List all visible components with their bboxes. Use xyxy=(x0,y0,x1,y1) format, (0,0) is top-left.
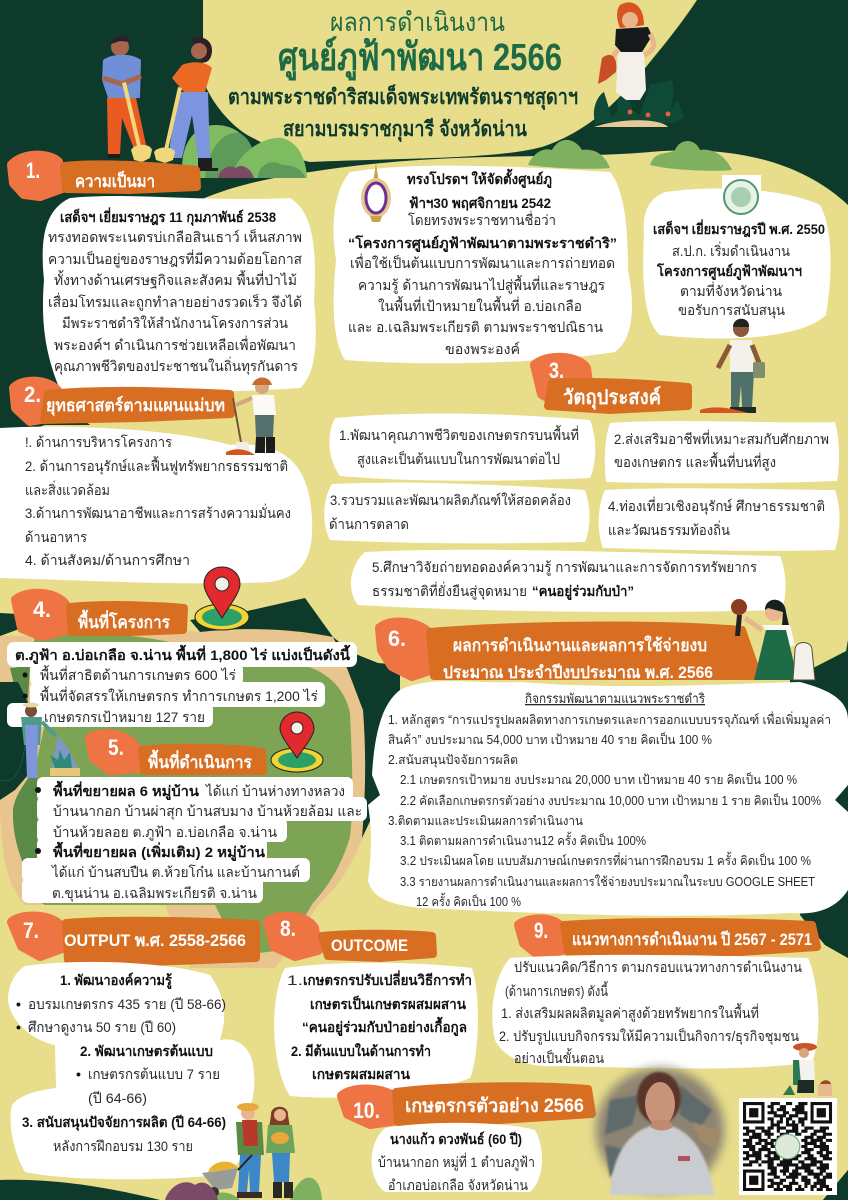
panel: strategy: 4. ด้านสังคม/ด้านการศึกษา xyxy=(25,552,190,568)
panel: output: เกษตรกรต้นแบบ 7 ราย xyxy=(88,1066,220,1082)
panel: output xyxy=(8,962,254,1179)
panel: guidelines: ปรับแนวคิด/วิธีการ ตามกรอบแนวทางการดำเนินงาน xyxy=(514,959,802,975)
objective 4 xyxy=(599,488,840,551)
panel: establishment: และ อ.เฉลิมพระเกียรติ ตามพระราชปณิธาน xyxy=(348,319,603,335)
panel: output: (ปี 64-66) xyxy=(88,1090,147,1106)
operating area text xyxy=(22,777,367,903)
panel: guidelines: (ด้านการเกษตร) ดังนี้ xyxy=(505,981,608,999)
project area text: พื้นที่สาธิตด้านการเกษตร 600 ไร่ xyxy=(40,665,236,683)
panel: output: • xyxy=(76,1066,81,1082)
objective 5 xyxy=(351,550,786,612)
section 4 badge xyxy=(16,594,184,636)
operating area text: ได้แก่ บ้านห่างทางหลวง xyxy=(205,783,345,799)
section 10 badge: 10. xyxy=(353,1098,380,1123)
panel: results and budget: 2.1 เกษตรกรเป้าหมาย งบประมาณ 20,000 บาท เป้าหมาย 40 ราย คิดเป็น 100 % xyxy=(400,772,797,787)
panel: establishment: ในพื้นที่เป้าหมายในพื้นที่ อ.บ่อเกลือ xyxy=(378,296,582,314)
panel: establishment: ความรู้ ด้านการพัฒนาไปสู่พื้นที่และราษฎร xyxy=(358,275,605,294)
panel: establishment: โดยทรงพระราชทานชื่อว่า xyxy=(408,211,556,228)
section 2 badge: 2. xyxy=(24,382,41,407)
panel: outcome: 1. xyxy=(287,972,303,988)
dark right corner section 6 xyxy=(790,650,848,700)
section 9 badge: แนวทางการดำเนินงาน ปี 2567 - 2571 xyxy=(572,929,812,949)
objective 2: 2.ส่งเสริมอาชีพที่เหมาะสมกับศักยภาพ xyxy=(614,430,829,447)
dark bottom right corner xyxy=(800,915,848,1200)
panel: royal visit 2550: ส.ป.ก. เริ่มดำเนินงาน xyxy=(672,242,790,259)
panel: outcome: เกษตรกรปรับเปลี่ยนวิธีการทำ xyxy=(303,970,472,988)
panel: background text: ทั้งทางด้านเศรษฐกิจและสังคม พื้นที่ป่าไม้ xyxy=(54,270,297,289)
title block: สยามบรมราชกุมารี จังหวัดน่าน xyxy=(283,117,528,143)
panel: output: ศึกษาดูงาน 50 ราย (ปี 60) xyxy=(28,1019,176,1036)
section 9 badge xyxy=(519,918,817,956)
objective 3: ด้านการตลาด xyxy=(329,516,409,532)
panel: royal visit 2550: เสด็จฯ เยี่ยมราษฎรปี พ.ศ. 2550 xyxy=(653,219,825,238)
panel: results and budget: กิจกรรมพัฒนาตามแนวพระราชดำริ xyxy=(525,691,705,706)
section 7 badge xyxy=(12,916,256,962)
bushes behind header xyxy=(182,125,307,178)
panel: outcome: เกษตรเป็นเกษตรผสมผสาน xyxy=(310,995,466,1012)
panel: results and budget: 3.1 ติดตามผลการดำเนินงาน12 ครั้ง คิดเป็น 100% xyxy=(400,831,646,848)
section 5 badge: 5. xyxy=(108,735,124,760)
illustration: woman with flowers xyxy=(731,599,815,680)
panel: results and budget: 2.2 คัดเลือกเกษตรกรตัวอย่าง งบประมาณ 10,000 บาท เป้าหมาย 1 ราย คิดเป็น 100% xyxy=(400,793,821,808)
panel: establishment: เพื่อใช้เป็นต้นแบบการพัฒนาและการถ่ายทอด xyxy=(350,254,615,271)
panel: model farmer: อำเภอบ่อเกลือ จังหวัดน่าน xyxy=(388,1177,528,1193)
illustration: man and woman with shovels xyxy=(102,36,218,171)
section 8 badge: 8. xyxy=(280,916,296,941)
panel: output: • xyxy=(16,1019,21,1035)
title block: ศูนย์ภูฟ้าพัฒนา 2566 xyxy=(278,36,562,81)
photo: model farmer portrait xyxy=(596,1068,724,1195)
project area text: ต.ภูฟ้า อ.บ่อเกลือ จ.น่าน พื้นที่ 1,800 ไร่ แบ่งเป็นดังนี้ xyxy=(15,644,351,664)
panel: background text: เสื่อมโทรมและถูกทำลายอย่างรวดเร็ว จึงได้ xyxy=(48,293,302,311)
panel: background text: มีพระราชดำริให้สำนักงานโครงการส่วน xyxy=(62,315,288,331)
section 4 badge: 4. xyxy=(33,597,51,622)
icon: ALRO seal xyxy=(722,175,761,217)
section 1 badge: 1. xyxy=(26,158,40,183)
project area text: เกษตรกรเป้าหมาย 127 ราย xyxy=(44,709,205,725)
project area text: พื้นที่จัดสรรให้เกษตรกร ทำการเกษตร 1,200 ไร่ xyxy=(40,686,318,704)
panel: output: 1. พัฒนาองค์ความรู้ xyxy=(60,972,172,989)
bush right 1 xyxy=(528,140,610,169)
section 6 badge: ผลการดำเนินงานและผลการใช้จ่ายงบ xyxy=(453,635,707,655)
panel: guidelines: อย่างเป็นขั้นตอน xyxy=(514,1048,604,1066)
section 6 badge xyxy=(380,623,758,682)
panel: output: • xyxy=(16,996,21,1012)
panel: establishment: “โครงการศูนย์ภูฟ้าพัฒนาตามพระราชดำริ” xyxy=(348,234,617,252)
panel: guidelines: 2. ปรับรูปแบบกิจกรรมให้มีความเป็นกิจการ/ธุรกิจชุมชน xyxy=(499,1027,799,1045)
map of project area xyxy=(0,629,366,968)
panel: strategy: ด้านอาหาร xyxy=(25,529,87,545)
panel: output: อบรมเกษตรกร 435 ราย (ปี 58-66) xyxy=(28,996,226,1012)
QR code xyxy=(739,1098,837,1195)
objective 5: ธรรมชาติที่ยั่งยืนสู่จุดหมาย xyxy=(372,582,527,600)
panel: outcome: เกษตรผสมผสาน xyxy=(312,1066,410,1082)
panel: background text: ความเป็นอยู่ของราษฎรที่มีความด้อยโอกาส xyxy=(48,250,302,268)
panel: results and budget: 2.สนับสนุนปัจจัยการผลิต xyxy=(388,753,518,768)
illustration: man sowing seeds xyxy=(700,319,765,413)
panel: guidelines xyxy=(492,955,818,1068)
panel: outcome: “คนอยู่ร่วมกับป่าอย่างเกื้อกูล xyxy=(302,1016,467,1036)
section 6 badge: 6. xyxy=(388,626,406,651)
panel: results and budget xyxy=(368,681,848,916)
panel: results and budget: 3.2 ประเมินผลโดย แบบสัมภาษณ์เกษตรกรที่ผ่านการฝึกอบรม 1 ครั้ง คิดเป็น 100 % xyxy=(400,851,811,868)
section 5 badge: พื้นที่ดำเนินการ xyxy=(148,749,253,772)
panel: output: 2. พัฒนาเกษตรต้นแบบ xyxy=(80,1043,213,1059)
illustration: man watering plants xyxy=(0,702,80,781)
section 9 badge: 9. xyxy=(534,918,548,943)
section 5 badge xyxy=(90,734,263,772)
section 8 badge: OUTCOME xyxy=(331,936,408,955)
panel: output: 3. สนับสนุนปัจจัยการผลิต (ปี 64-66) xyxy=(22,1114,226,1131)
panel: royal visit 2550 xyxy=(643,175,831,338)
section 7 badge: OUTPUT พ.ศ. 2558-2566 xyxy=(64,931,246,950)
panel: strategy: 3.ด้านการพัฒนาอาชีพและการสร้างความมั่นคง xyxy=(25,504,291,521)
dark areas around map xyxy=(0,598,400,838)
panel: outcome: 2. มีต้นแบบในด้านการทำ xyxy=(291,1042,431,1059)
section 1 badge xyxy=(12,156,197,196)
section 3 badge: 3. xyxy=(549,358,564,383)
panel: strategy xyxy=(0,427,312,583)
objective 2: ของเกษตกร และพื้นที่บนที่สูง xyxy=(614,452,776,471)
objective 1: สูงและเป็นต้นแบบในการพัฒนาต่อไป xyxy=(357,450,560,468)
operating area text: บ้านห้วยลอย ต.ภูฟ้า อ.บ่อเกลือ จ.น่าน xyxy=(53,824,277,841)
objective 4: 4.ท่องเที่ยวเชิงอนุรักษ์ ศึกษาธรรมชาติ xyxy=(608,497,825,515)
objective 3 xyxy=(324,483,590,543)
panel: establishment xyxy=(334,163,632,363)
panel: background text: เสด็จฯ เยี่ยมราษฎร 11 กุมภาพันธ์ 2538 xyxy=(60,207,276,226)
panel: background text xyxy=(43,196,316,392)
panel: strategy: 2. ด้านการอนุรักษ์และฟื้นฟูทรัพยากรธรรมชาติ xyxy=(25,456,288,475)
section 3 badge xyxy=(535,358,688,410)
title block: ผลการดำเนินงาน xyxy=(330,7,505,37)
panel: royal visit 2550: ขอรับการสนับสนุน xyxy=(678,302,785,319)
panel: royal visit 2550: โครงการศูนย์ภูฟ้าพัฒนาฯ xyxy=(656,262,802,280)
operating area text: บ้านนากอก บ้านผ่าสุก บ้านสบมาง บ้านห้วยล้อม และ xyxy=(53,803,362,820)
panel: model farmer: นางแก้ว ดวงพันธ์ (60 ปี) xyxy=(390,1131,522,1147)
section 2 badge xyxy=(14,382,231,421)
project area text xyxy=(7,642,357,727)
panel: royal visit 2550: ตามที่จังหวัดน่าน xyxy=(680,282,782,299)
illustration: woman with watering can xyxy=(594,2,684,127)
illustration: farmer with spade xyxy=(226,377,276,455)
objective 1: 1.พัฒนาคุณภาพชีวิตของเกษตรกรบนพื้นที่ xyxy=(339,425,579,444)
panel: establishment: ทรงโปรดฯ ให้จัดตั้งศูนย์ภู xyxy=(407,168,552,188)
section 10 badge: เกษตรกรตัวอย่าง 2566 xyxy=(405,1096,584,1117)
section 10 badge xyxy=(342,1086,592,1124)
illustration: couple with wheelbarrow xyxy=(200,1103,322,1200)
section 7 badge: 7. xyxy=(23,918,39,943)
operating area text: ต.ขุนน่าน อ.เฉลิมพระเกียรติ จ.น่าน xyxy=(52,885,257,902)
objective 5: “คนอยู่ร่วมกับป่า” xyxy=(532,583,634,600)
objective 3: 3.รวบรวมและพัฒนาผลิตภัณฑ์ให้สอดคล้อง xyxy=(330,492,571,508)
panel: background text: คุณภาพชีวิตของประชาชนในถิ่นทุรกันดาร xyxy=(54,357,298,375)
header yellow shape xyxy=(203,0,697,162)
panel: results and budget: 3.ติดตามและประเมินผลการดำเนินงาน xyxy=(388,814,583,828)
objective 2 xyxy=(605,421,839,483)
title block: ตามพระราชดำริสมเด็จพระเทพรัตนราชสุดาฯ xyxy=(228,83,578,111)
section 4 badge: พื้นที่โครงการ xyxy=(78,609,171,632)
operating area text: พื้นที่ขยายผล (เพิ่มเติม) 2 หมู่บ้าน xyxy=(53,841,265,861)
panel: output: หลังการฝึกอบรม 130 ราย xyxy=(53,1138,193,1154)
panel: results and budget: สินค้า” งบประมาณ 54,000 บาท เป้าหมาย 40 ราย คิดเป็น 100 % xyxy=(388,732,712,747)
panel: background text: ทรงทอดพระเนตรบ่เกลือสินเธาว์ เห็นสภาพ xyxy=(48,228,302,245)
operating area text: พื้นที่ขยายผล 6 หมู่บ้าน xyxy=(53,780,199,800)
objective 1 xyxy=(329,414,595,481)
objective 4: และวัฒนธรรมท้องถิ่น xyxy=(608,521,730,538)
objective 5: 5.ศึกษาวิจัยถ่ายทอดองค์ความรู้ การพัฒนาและการจัดการทรัพยากร xyxy=(372,559,757,576)
panel: strategy: และสิ่งแวดล้อม xyxy=(25,481,110,498)
icon: map pin 2 xyxy=(271,712,323,772)
dark top left wedge behind section 2 xyxy=(0,400,90,425)
section 6 badge: ประมาณ ประจำปีงบประมาณ พ.ศ. 2566 xyxy=(443,662,713,682)
panel: background text: พระองค์ฯ ดำเนินการช่วยเหลือเพื่อพัฒนา xyxy=(54,336,296,353)
panel: establishment: ของพระองค์ xyxy=(445,341,520,357)
bottom plant xyxy=(165,1182,218,1200)
section 3 badge: วัตถุประสงค์ xyxy=(563,386,661,410)
section 1 badge: ความเป็นมา xyxy=(75,169,155,191)
section 2 badge: ยุทธศาสตร์ตามแผนแม่บท xyxy=(46,395,225,416)
operating area text: ได้แก่ บ้านสบปืน ต.ห้วยโก๋น และบ้านกานต์ xyxy=(51,864,300,880)
icon: map pin 1 xyxy=(195,567,249,630)
panel: results and budget: 1. หลักสูตร “การแปรรูปผลผลิตทางการเกษตรและการออกแบบบรรจุภัณฑ์ เพื่อเพิ่มมูลค่า xyxy=(388,711,831,728)
panel: establishment: ฟ้าฯ30 พฤศจิกายน 2542 xyxy=(409,195,551,211)
section 8 badge xyxy=(268,916,433,958)
panel: results and budget: 12 ครั้ง คิดเป็น 100 % xyxy=(416,892,521,909)
panel: outcome xyxy=(274,963,478,1098)
illustration: small farmer with basket xyxy=(783,1043,832,1096)
panel: strategy: !. ด้านการบริหารโครงการ xyxy=(25,434,172,450)
title block xyxy=(228,7,578,143)
bush right 2 xyxy=(650,141,732,171)
panel: guidelines: 1. ส่งเสริมผลผลิตมูลค่าสูงด้วยทรัพยากรในพื้นที่ xyxy=(501,1003,759,1022)
panel: model farmer: บ้านนากอก หมู่ที่ 1 ตำบลภูฟ้า xyxy=(378,1153,535,1171)
icon: royal emblem xyxy=(361,163,391,222)
panel: model farmer xyxy=(371,1123,542,1193)
